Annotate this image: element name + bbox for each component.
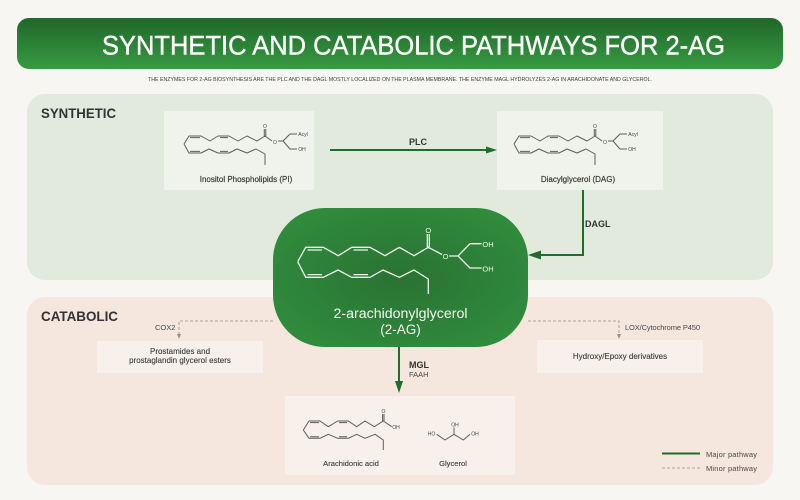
molecule card: inositol phospholipids: Inositol Phospholipids (PI) <box>200 175 293 184</box>
title banner: SYNTHETIC AND CATABOLIC PATHWAYS FOR 2-AG <box>102 30 725 60</box>
molecule card: inositol phospholipids: Acyl <box>298 132 308 138</box>
molecule card: diacylglycerol <box>497 111 663 190</box>
molecule card: inositol phospholipids: O <box>263 124 267 130</box>
molecule card: inositol phospholipids <box>164 111 314 190</box>
product card: prostamides: Prostamides and <box>150 347 210 356</box>
product card: arachidonic acid and glycerol: Arachidonic acid <box>323 459 379 468</box>
molecule: arachidonic acid: O <box>382 409 386 415</box>
product card: hydroxy/epoxy derivatives: Hydroxy/Epoxy derivatives <box>573 352 667 361</box>
label: MGL and FAAH <box>409 360 429 379</box>
molecule: glycerol: OH <box>451 422 459 428</box>
arrow: DAGL major pathway <box>528 190 583 260</box>
molecule card: diacylglycerol: O <box>593 124 597 130</box>
central node: 2-AG: (2-AG) <box>380 322 421 337</box>
central node: 2-AG: O <box>425 226 431 235</box>
label: MGL and FAAH: FAAH <box>409 370 429 379</box>
legend: Major pathway <box>706 450 757 459</box>
molecule: arachidonic acid: OH <box>392 425 400 431</box>
central node: 2-AG: OH <box>482 240 494 249</box>
title banner <box>17 18 783 69</box>
molecule: glycerol <box>428 422 479 440</box>
label: MGL and FAAH: MGL <box>409 360 429 370</box>
arrow: MGL major pathway <box>395 347 403 393</box>
molecule card: diacylglycerol: O <box>603 140 607 146</box>
label: LOX/Cytochrome P450: LOX/Cytochrome P450 <box>625 323 700 332</box>
legend: Minor pathway <box>706 464 757 473</box>
subtitle text: THE ENZYMES FOR 2-AG BIOSYNTHESIS ARE THE PLC AND THE DAGL MOSTLY LOCALIZED ON THE PLASMA MEMBRANE. THE ENZYME MAGL HYDROLYZES 2-AG IN ARACHIDONATE AND GLYCEROL. <box>148 77 652 83</box>
product card: prostamides <box>97 341 263 373</box>
label: PLC: PLC <box>409 137 428 147</box>
label: DAGL: DAGL <box>585 219 611 229</box>
molecule card: inositol phospholipids: O <box>273 140 277 146</box>
arrow: PLC major pathway <box>330 146 497 154</box>
arrow: COX2 minor pathway <box>177 321 273 339</box>
central node: 2-AG: O <box>443 252 449 261</box>
product card: prostamides: prostaglandin glycerol esters <box>129 356 231 365</box>
panel: synthetic: SYNTHETIC <box>41 105 116 121</box>
molecule card: diacylglycerol: Diacylglycerol (DAG) <box>541 175 615 184</box>
product card: arachidonic acid and glycerol <box>285 396 515 475</box>
molecule card: diacylglycerol: OH <box>628 147 636 153</box>
product card: hydroxy/epoxy derivatives <box>537 340 703 373</box>
legend <box>662 450 757 473</box>
molecule: glycerol: OH <box>471 432 479 438</box>
molecule card: diacylglycerol: Acyl <box>628 132 638 138</box>
panel: catabolic: CATABOLIC <box>41 308 118 324</box>
product card: arachidonic acid and glycerol: Glycerol <box>439 459 467 468</box>
central node: 2-AG: 2-arachidonylglycerol <box>334 306 468 321</box>
molecule: glycerol: HO <box>428 432 435 438</box>
central node: 2-AG <box>273 208 528 347</box>
molecule: arachidonic acid <box>303 409 400 450</box>
label: COX2: COX2 <box>155 323 175 332</box>
central node: 2-AG: OH <box>482 264 494 274</box>
arrow: LOX minor pathway <box>528 321 621 339</box>
molecule card: inositol phospholipids: OH <box>298 147 306 153</box>
